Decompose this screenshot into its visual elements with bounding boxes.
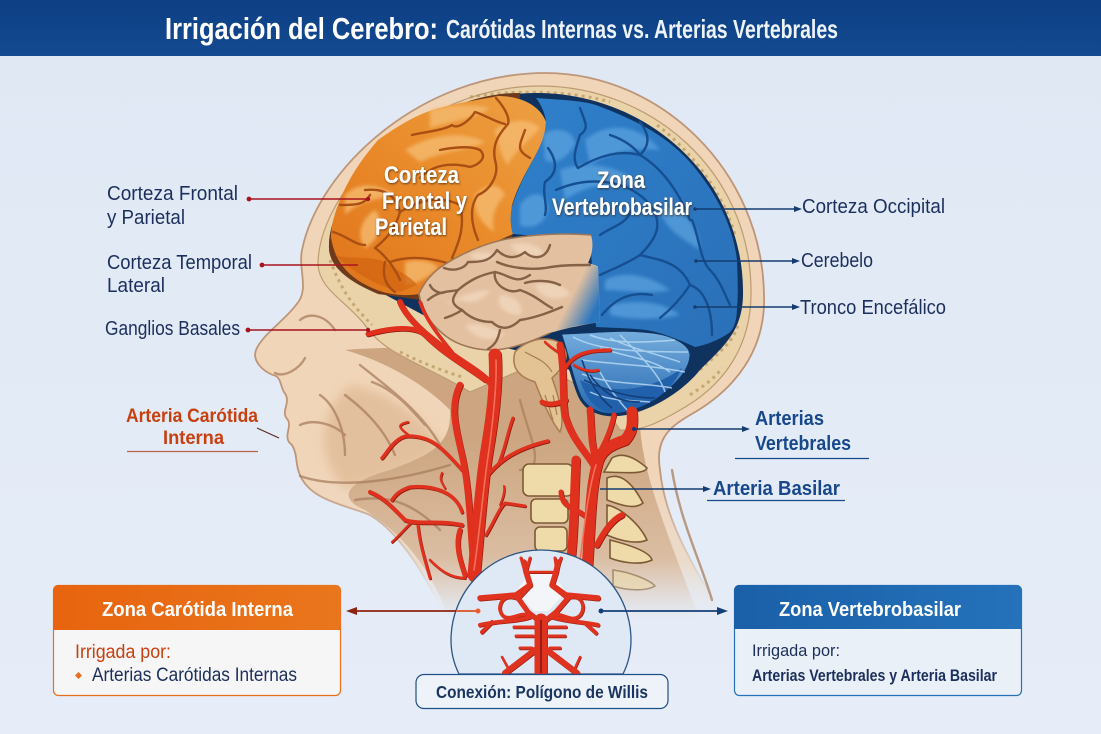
cerebellum xyxy=(560,330,691,415)
brain label: zona vertebrobasilar: Zona xyxy=(597,167,646,194)
title xyxy=(165,11,838,46)
panel: zona vertebrobasilar xyxy=(734,585,1022,696)
brain label: zona vertebrobasilar: Vertebrobasilar xyxy=(552,194,692,221)
arrow: vertebrobasilar zone connection xyxy=(598,607,728,615)
bullet xyxy=(75,672,82,679)
label: arteria carótida interna: Interna xyxy=(163,427,224,449)
panel heading: Zona Vertebrobasilar xyxy=(779,599,961,621)
title: Carótidas Internas vs. Arterias Vertebrales xyxy=(446,14,838,44)
orange lobe sulci xyxy=(333,98,530,292)
label: arterias vertebrales: Vertebrales xyxy=(755,433,851,455)
carotid artery tree xyxy=(368,302,633,579)
vertebrae xyxy=(523,455,655,590)
panel header orange xyxy=(53,585,340,630)
label: corteza frontal y parietal: Corteza Frontal xyxy=(107,183,238,205)
label: corteza occipital: Corteza Occipital xyxy=(802,196,945,218)
label: arteria carótida interna: Arteria Carótida xyxy=(126,405,258,427)
brain label: corteza frontal y parietal xyxy=(375,162,468,241)
label: arterias vertebrales xyxy=(735,408,869,458)
label: cerebelo: Cerebelo xyxy=(801,250,873,272)
artery list: Arterias Vertebrales y Arteria Basilar xyxy=(752,667,997,685)
orange lobe highlights xyxy=(345,105,540,285)
willis center opening xyxy=(516,572,566,611)
temporal lobe sulci xyxy=(428,245,590,349)
jaw and cheek folds xyxy=(275,316,712,600)
left leader lines xyxy=(246,197,370,332)
label: ganglios basales: Ganglios Basales xyxy=(105,318,240,340)
temporal lobe outline xyxy=(419,234,591,350)
brain label: zona vertebrobasilar xyxy=(552,167,692,221)
irrigada por text: Irrigada por: xyxy=(75,642,171,663)
label box: conexión polígono de willis: Conexión: Polígono de Willis xyxy=(436,682,648,702)
left labels xyxy=(105,183,252,340)
header bar xyxy=(0,0,1101,56)
head anatomy illustration xyxy=(255,73,764,620)
label box: conexión polígono de willis xyxy=(416,674,668,708)
carotid label tick xyxy=(257,428,279,438)
brain label: corteza frontal y parietal: Corteza xyxy=(384,162,460,189)
right labels xyxy=(800,196,946,319)
temporal lobe highlights xyxy=(445,243,570,339)
blue vertebrobasilar lobe xyxy=(511,98,738,347)
brain label: corteza frontal y parietal: Parietal xyxy=(375,214,447,241)
label: corteza frontal y parietal: y Parietal xyxy=(107,207,185,229)
blue lobe sulci xyxy=(544,108,730,335)
brainstem xyxy=(514,339,566,432)
brain label: corteza frontal y parietal: Frontal y xyxy=(382,188,468,215)
blue fade over temporal lobe xyxy=(550,262,600,334)
artery list item: Arterias Carótidas Internas xyxy=(92,665,297,686)
orange frontal and parietal lobe xyxy=(331,96,546,295)
panel header blue xyxy=(734,585,1021,629)
arrow: carotid zone connection xyxy=(346,607,480,615)
right leader lines xyxy=(600,206,802,492)
label: tronco encefálico: Tronco Encefálico xyxy=(800,297,946,319)
label: corteza temporal lateral: Lateral xyxy=(107,275,165,297)
willis arteries xyxy=(480,558,598,674)
head silhouette xyxy=(255,73,764,620)
brain cavity xyxy=(329,93,743,416)
label: corteza frontal y parietal xyxy=(107,183,238,229)
label: arteria carótida interna xyxy=(126,405,258,452)
skull bone layer xyxy=(318,86,751,430)
inset circle: polígono de Willis xyxy=(451,550,631,674)
cheek and jaw shading xyxy=(324,385,442,488)
irrigada por text: Irrigada por: xyxy=(752,641,840,660)
temporal lobe xyxy=(419,234,600,350)
panel heading: Zona Carótida Interna xyxy=(102,599,294,621)
label: corteza temporal lateral: Corteza Temporal xyxy=(107,252,252,274)
label: corteza temporal lateral xyxy=(107,252,252,297)
blue lobe highlights xyxy=(520,128,700,319)
skull bone speckle xyxy=(330,92,738,395)
title: Irrigación del Cerebro: xyxy=(165,11,438,46)
label: arterias vertebrales: Arterias xyxy=(755,408,824,430)
panel: zona carótida interna xyxy=(53,585,340,696)
label: arteria basilar: Arteria Basilar xyxy=(713,478,840,500)
neck interior xyxy=(345,345,700,620)
